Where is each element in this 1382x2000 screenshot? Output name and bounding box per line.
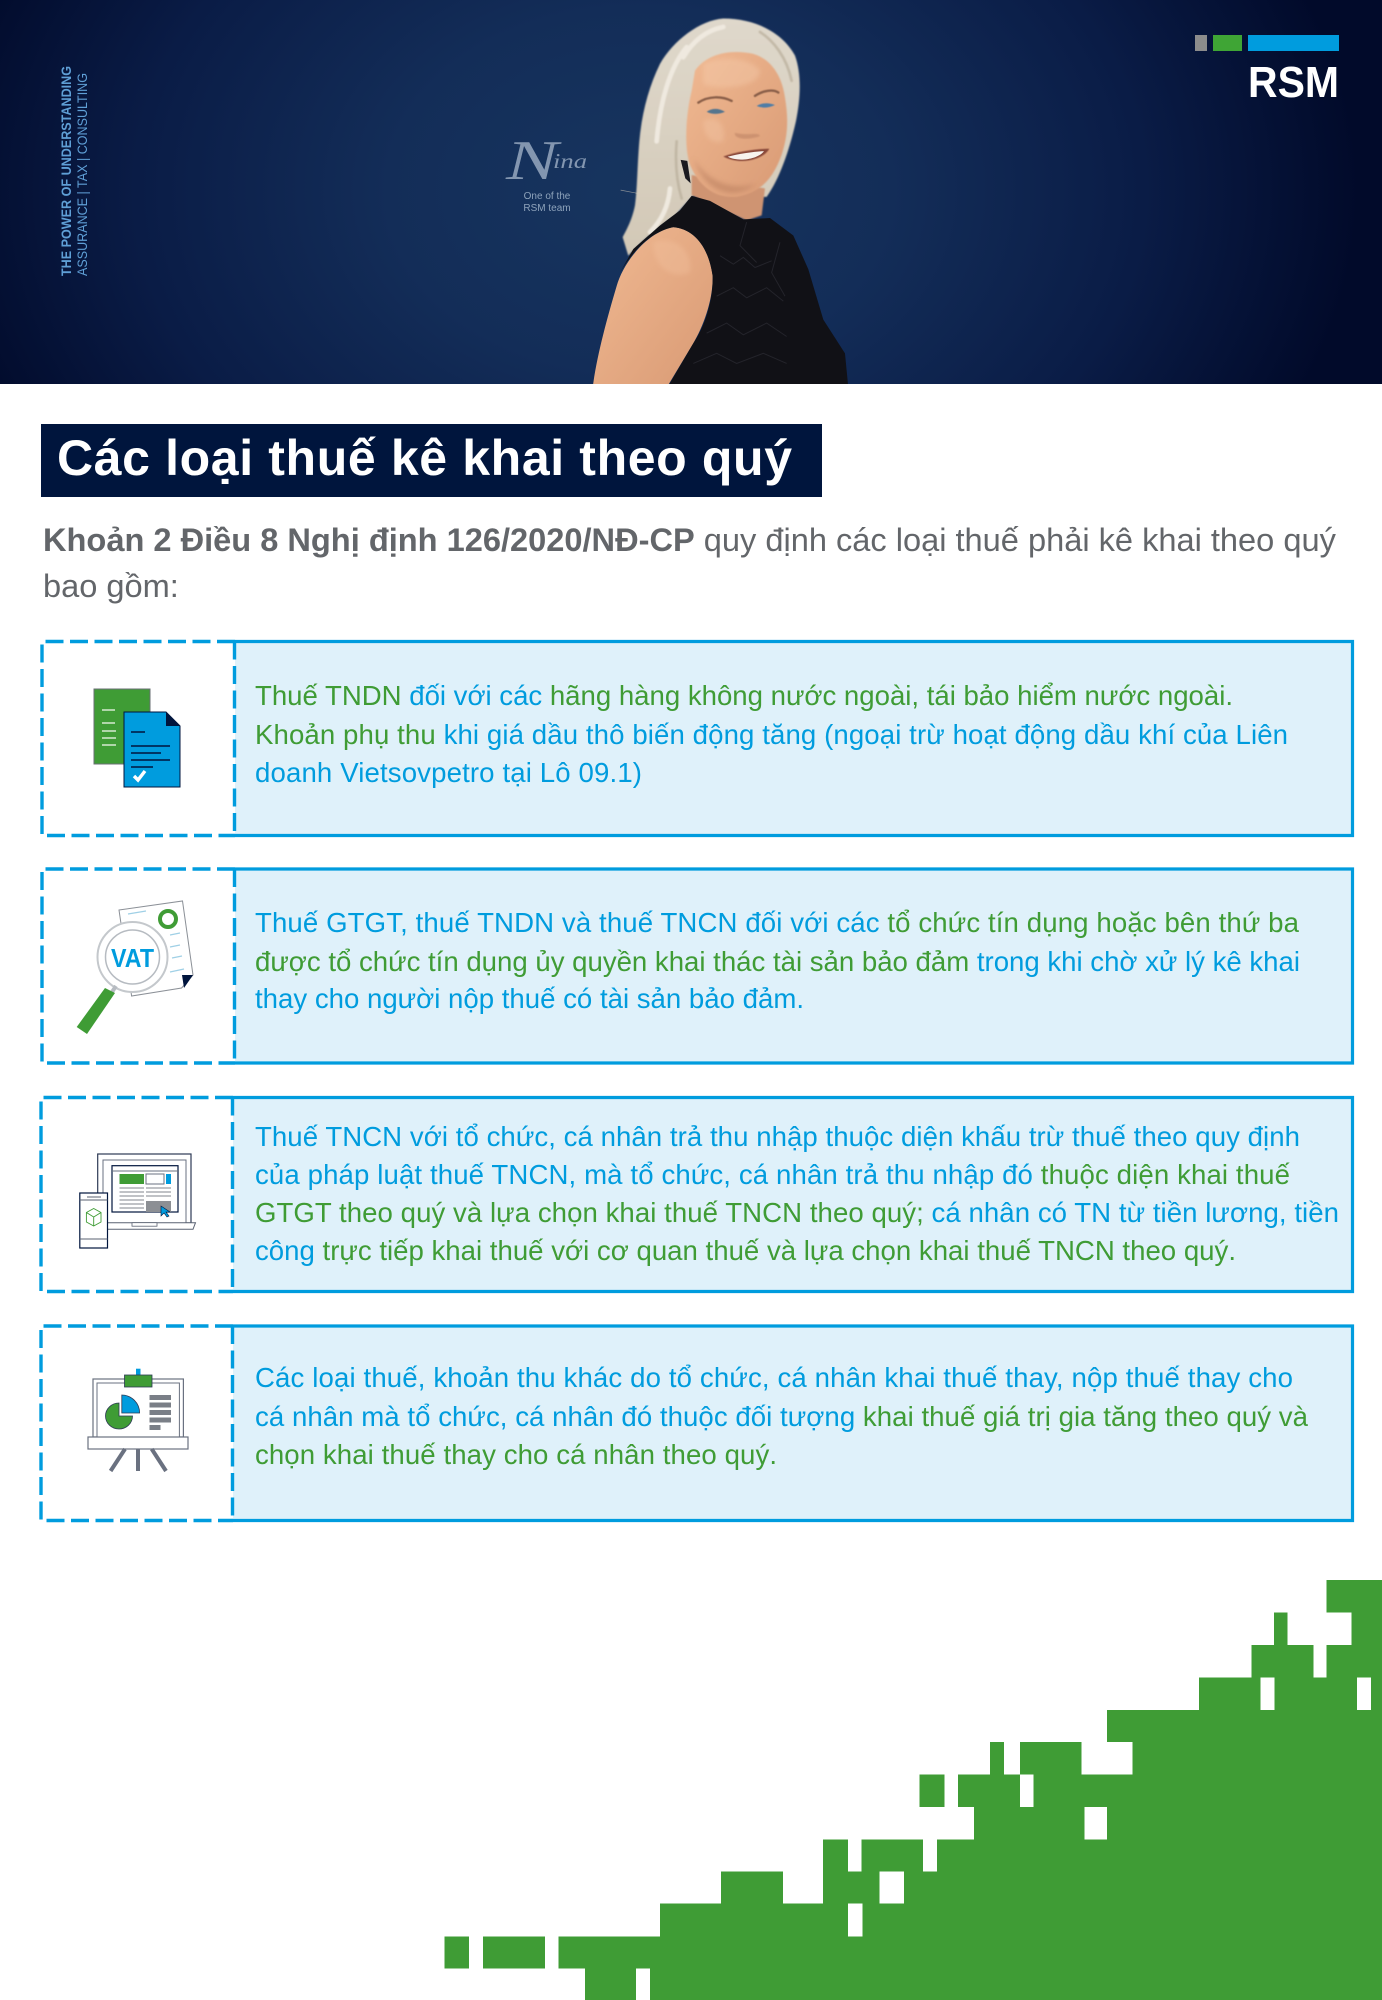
vertical tagline: ASSURANCE | TAX | CONSULTING — [74, 73, 90, 276]
signature — [505, 130, 587, 192]
card 3 text — [255, 1121, 1339, 1266]
card 4 text: cá nhân mà tổ chức, cá nhân đó thuộc đối tượng khai thuế giá trị gia tăng theo quý và — [255, 1401, 1309, 1432]
signature caption — [523, 191, 571, 214]
panel: card 4 — [41, 1326, 1352, 1520]
eyes and brows — [698, 91, 778, 103]
card 1 text: Thuế TNDN đối với các hãng hàng không nước ngoài, tái bảo hiểm nước ngoài. — [255, 680, 1233, 711]
card 2 text — [255, 907, 1300, 1014]
card 2 text: thay cho người nộp thuế có tài sản bảo đảm. — [255, 983, 804, 1014]
portrait — [593, 19, 848, 388]
earring — [681, 160, 691, 183]
header banner — [0, 0, 1382, 388]
card 2 text: được tổ chức tín dụng ủy quyền khai thác tài sản bảo đảm trong khi chờ xử lý kê khai — [255, 946, 1300, 977]
smile — [723, 149, 769, 161]
face — [686, 52, 787, 197]
icon: VAT magnifier — [77, 901, 193, 1034]
card 3 text: GTGT theo quý và lựa chọn khai thuế TNCN theo quý; cá nhân có TN từ tiền lương, tiền — [255, 1197, 1339, 1228]
card 1 text: Khoản phụ thu khi giá dầu thô biến động tăng (ngoại trừ hoạt động dầu khí của Liên — [255, 719, 1288, 750]
vertical tagline — [58, 66, 90, 276]
icon: laptop and phone — [80, 1154, 196, 1248]
intro paragraph: bao gồm: — [43, 567, 179, 604]
card 3 text: công trực tiếp khai thuế với cơ quan thuế và lựa chọn khai thuế TNCN theo quý. — [255, 1235, 1236, 1266]
nose shadow — [735, 133, 760, 139]
panel: card 2 — [42, 869, 1352, 1063]
card 4 text: chọn khai thuế thay cho cá nhân theo quý. — [255, 1439, 777, 1470]
vertical tagline: THE POWER OF UNDERSTANDING — [58, 66, 74, 276]
signature caption: RSM team — [523, 203, 571, 214]
title: Các loại thuế kê khai theo quý — [57, 430, 792, 486]
card 1 text — [255, 680, 1288, 788]
icon: VAT magnifier: VAT — [111, 943, 154, 973]
icon: presentation board — [88, 1369, 188, 1471]
intro paragraph — [43, 521, 1337, 604]
signature: N — [505, 130, 562, 192]
decorative green pixel staircase — [444, 1580, 1382, 2000]
signature caption: One of the — [524, 191, 571, 202]
card 3 text: Thuế TNCN với tổ chức, cá nhân trả thu nhập thuộc diện khấu trừ thuế theo quy định — [255, 1121, 1300, 1152]
icon: documents — [94, 689, 180, 787]
card 4 text: Các loại thuế, khoản thu khác do tổ chức, cá nhân khai thuế thay, nộp thuế thay cho — [255, 1362, 1293, 1393]
neck — [692, 175, 765, 220]
card 2 text: Thuế GTGT, thuế TNDN và thuế TNCN đối với các tổ chức tín dụng hoặc bên thứ ba — [255, 907, 1300, 938]
dress — [620, 196, 848, 388]
card 1 text: doanh Vietsovpetro tại Lô 09.1) — [255, 757, 642, 788]
card 3 text: của pháp luật thuế TNCN, mà tổ chức, cá nhân trả thu nhập đó thuộc diện khai thuế — [255, 1159, 1290, 1190]
signature: ina — [553, 149, 587, 173]
RSM logo: RSM — [1248, 58, 1339, 107]
intro paragraph: Khoản 2 Điều 8 Nghị định 126/2020/NĐ-CP quy định các loại thuế phải kê khai theo quý — [43, 521, 1337, 558]
arm — [593, 227, 713, 388]
panel: card 3 — [41, 1098, 1352, 1292]
RSM logo — [1195, 35, 1339, 107]
card 4 text — [255, 1362, 1309, 1470]
panel: card 1 — [42, 642, 1352, 836]
